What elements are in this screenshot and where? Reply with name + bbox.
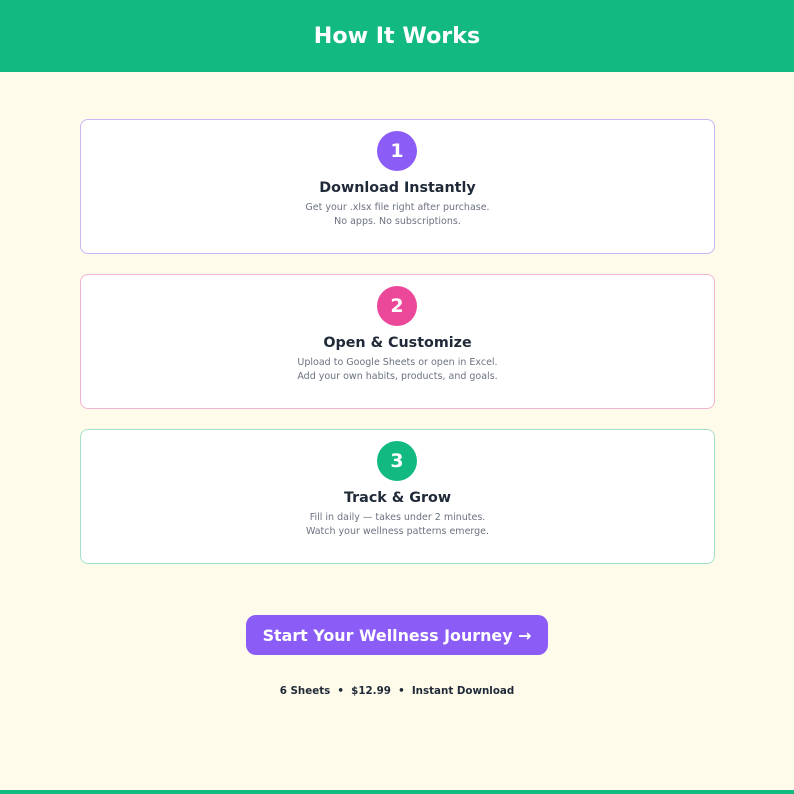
icon: number 2 (377, 286, 417, 326)
step 1 description (305, 202, 490, 227)
step 2 description (297, 357, 498, 382)
footer info line: 6 Sheets • $12.99 • Instant Download (280, 685, 514, 697)
step 3 description: Fill in daily — takes under 2 minutes. (310, 512, 485, 523)
card: step 3 (80, 429, 715, 564)
icon: number 2: 2 (390, 295, 404, 317)
step 3 description (306, 512, 489, 537)
icon: number 1: 1 (390, 140, 404, 162)
header: How It Works (0, 0, 794, 72)
step 2 description: Upload to Google Sheets or open in Excel. (297, 357, 498, 368)
icon: number 3 (377, 441, 417, 481)
step 1 description: Get your .xlsx file right after purchase. (305, 202, 490, 213)
button: call to action (246, 615, 548, 655)
button: call to action: Start Your Wellness Journey → (263, 626, 531, 645)
step 1 description: No apps. No subscriptions. (334, 216, 461, 227)
icon: number 3: 3 (390, 450, 404, 472)
card: step 2 (80, 274, 715, 409)
icon: number 1 (377, 131, 417, 171)
step 3 title: Track & Grow (344, 490, 451, 506)
step 2 title: Open & Customize (323, 335, 472, 351)
card: step 1 (80, 119, 715, 254)
header: How It Works: How It Works (314, 23, 480, 49)
step 2 description: Add your own habits, products, and goals. (297, 371, 498, 382)
step 3 description: Watch your wellness patterns emerge. (306, 526, 489, 537)
step 1 title: Download Instantly (319, 180, 476, 196)
